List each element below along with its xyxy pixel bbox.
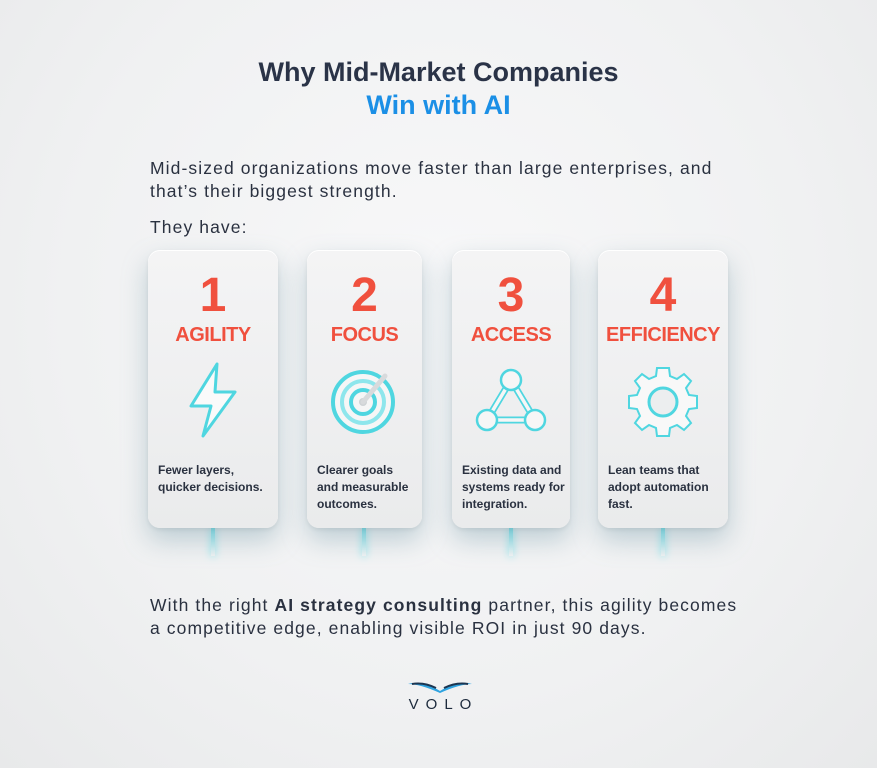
card 4: efficiency: adopt automation xyxy=(608,480,709,494)
title xyxy=(258,57,619,120)
they have: They have: xyxy=(150,217,248,237)
card 4: efficiency xyxy=(598,250,728,528)
card 2: focus: Clearer goals xyxy=(317,463,393,477)
card 1: agility: quicker decisions. xyxy=(158,480,263,494)
card 3: access: Existing data and xyxy=(462,463,561,477)
card 2: focus: 2 xyxy=(351,269,378,322)
title: Win with AI xyxy=(366,90,511,120)
card 2: focus xyxy=(307,250,422,528)
icon: target xyxy=(331,370,395,434)
card 3: access: systems ready for xyxy=(462,480,565,494)
closing text: With the right AI strategy consulting partner, this agility becomes a competitive edge, enabling visible ROI in just 90 days. xyxy=(150,595,737,638)
logo: volo xyxy=(408,682,478,713)
card 3: access xyxy=(452,250,570,528)
card 4: efficiency: fast. xyxy=(608,497,633,511)
icon: lightning xyxy=(189,362,237,438)
card 4: efficiency: EFFICIENCY xyxy=(606,324,720,346)
icon: network triangle xyxy=(476,368,546,432)
card 1: agility xyxy=(148,250,278,528)
intro text: Mid-sized organizations move faster than large enterprises, and that’s their biggest strength. xyxy=(150,158,712,201)
card 2: focus: and measurable xyxy=(317,480,408,494)
card 1: agility: Fewer layers, xyxy=(158,463,234,477)
card 3: access: ACCESS xyxy=(471,324,551,346)
card 1: agility: AGILITY xyxy=(175,324,251,346)
card 4: efficiency: 4 xyxy=(650,269,676,322)
logo: volo: VOLO xyxy=(409,696,478,713)
card 3: access: 3 xyxy=(498,269,524,322)
title: Why Mid-Market Companies xyxy=(258,57,619,87)
card 3: access: integration. xyxy=(462,497,527,511)
card 2: focus: outcomes. xyxy=(317,497,377,511)
card 1: agility: 1 xyxy=(200,269,226,322)
card 2: focus: FOCUS xyxy=(331,324,398,346)
card 4: efficiency: Lean teams that xyxy=(608,463,699,477)
icon: gear xyxy=(628,367,698,437)
